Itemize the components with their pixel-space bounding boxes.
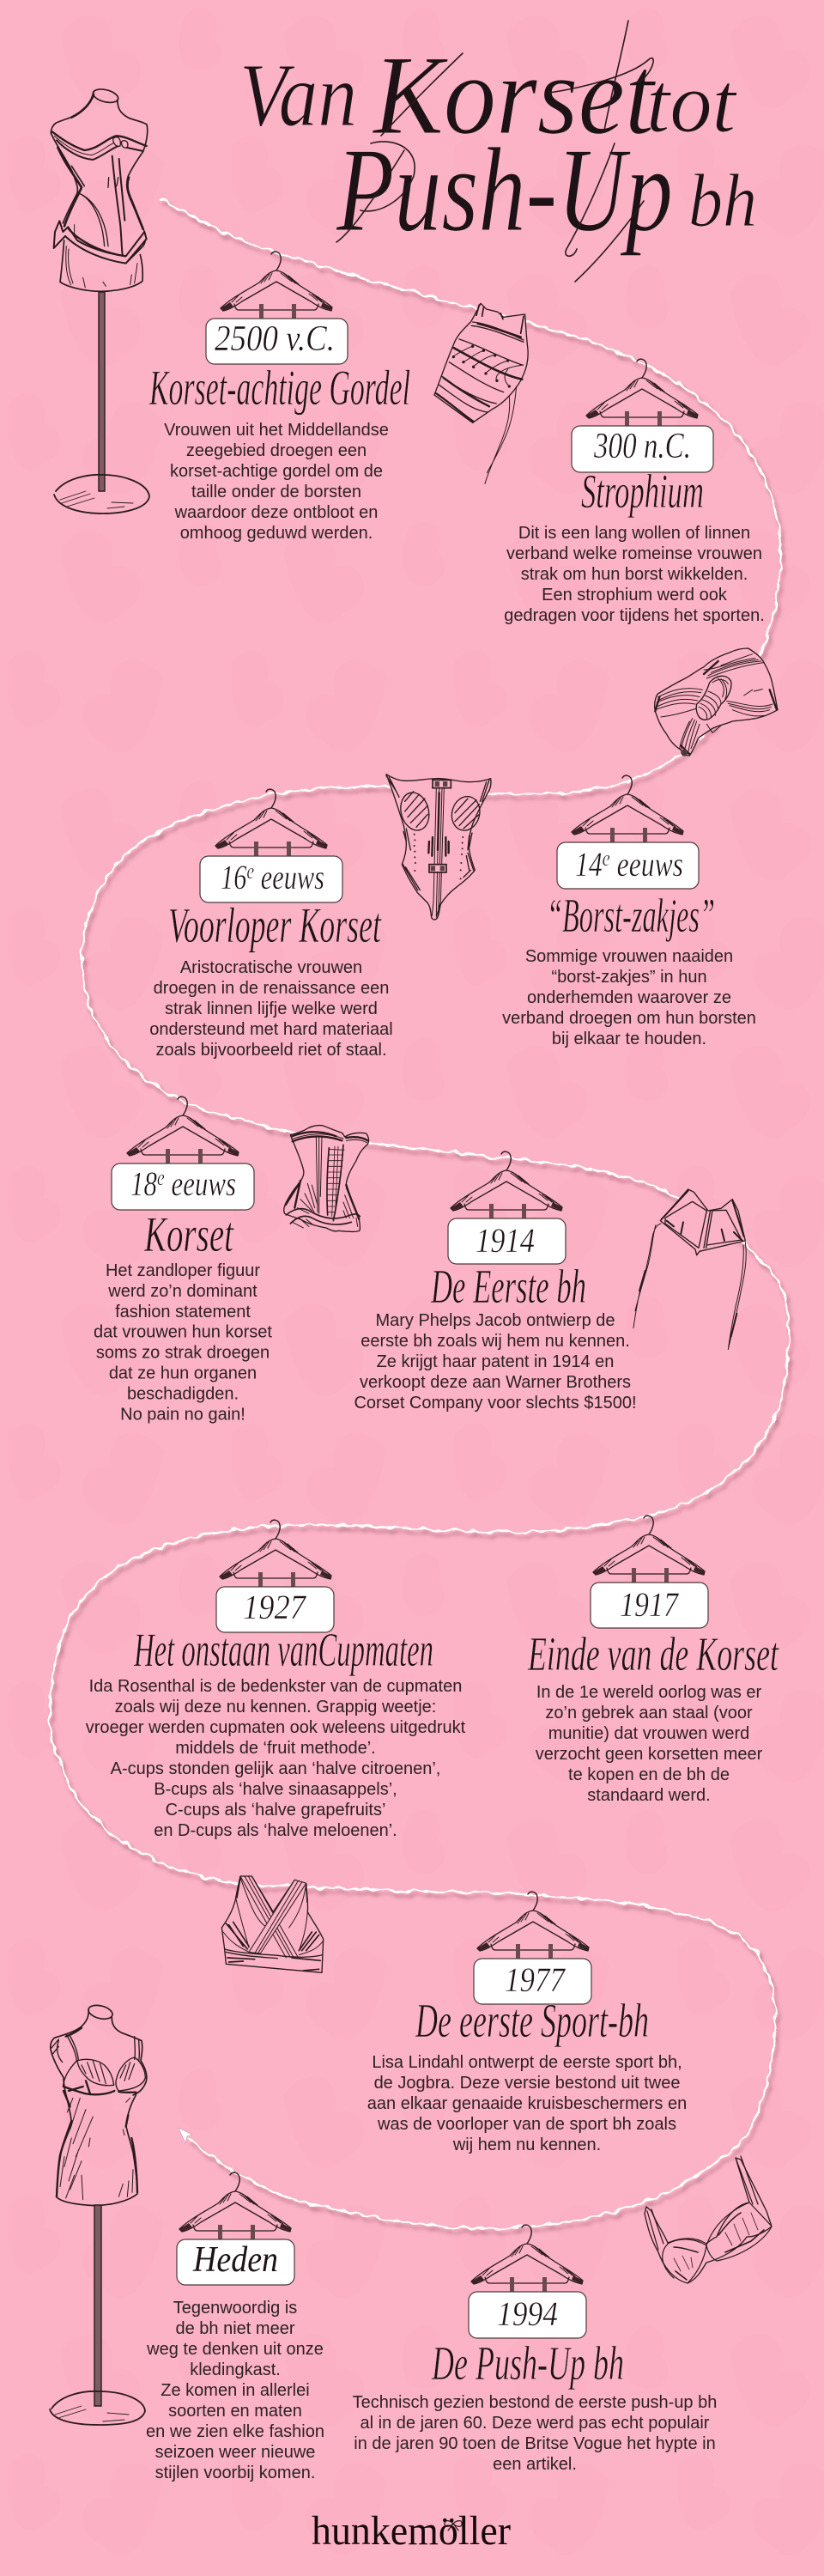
text block: waardoor deze ontbloot en: [174, 503, 378, 522]
text block: korset-achtige gordel om de: [170, 462, 383, 481]
date tag: eeuws: [610, 845, 683, 884]
date tag: eeuws: [165, 1164, 236, 1203]
icon: hanger: [593, 1516, 705, 1583]
text block: seizoen weer nieuwe: [155, 2443, 315, 2462]
text block: Technisch gezien bestond de eerste push-up bh: [353, 2393, 717, 2412]
panel: 1977: [367, 1892, 687, 2154]
heading: De eerste Sport-bh: [415, 1995, 649, 2048]
date tag: 1927: [243, 1588, 307, 1626]
panel: 14e eeuws: [502, 775, 756, 1048]
text block: eerste bh zoals wij hem nu kennen.: [360, 1332, 630, 1351]
icon: hanger: [477, 1892, 589, 1959]
date tag: Heden: [192, 2240, 278, 2280]
panel: 1927: [86, 1520, 466, 1840]
text block: een artikel.: [493, 2455, 577, 2474]
text block: Sommige vrouwen naaiden: [525, 947, 733, 966]
panel: 1914: [354, 1151, 637, 1413]
icon: eerste bh: [633, 1189, 746, 1350]
text block: strak om hun borst wikkelden.: [521, 565, 748, 584]
text block: stijlen voorbij komen.: [155, 2464, 315, 2482]
icon: hanger: [221, 252, 332, 319]
date tag: e: [157, 1165, 165, 1190]
logo: hunkemöller: [312, 2508, 511, 2554]
date tag: 14: [575, 845, 609, 884]
text block: in de jaren 90 toen de Britse Vogue het hypte in: [354, 2434, 716, 2453]
text block: kledingkast.: [190, 2360, 281, 2379]
text block: de Jogbra. Deze versie bestond uit twee: [374, 2074, 680, 2093]
heading: De Push-Up bh: [431, 2337, 624, 2391]
text block: zoals wij deze nu kennen. Grappig weetje:: [115, 1698, 436, 1716]
date tag: e: [603, 846, 610, 871]
text block: B-cups als ‘halve sinaasappels’,: [154, 1780, 397, 1799]
date tag: eeuws: [254, 858, 324, 896]
panel: Heden: [146, 2172, 324, 2482]
text block: Ze komen in allerlei: [161, 2381, 310, 2400]
date tag: 16: [221, 858, 255, 896]
text block: soms zo strak droegen: [96, 1344, 270, 1363]
icon: push-up bh: [645, 2156, 772, 2283]
date tag: 300 n.C.: [593, 427, 691, 466]
text block: fashion statement: [115, 1303, 251, 1321]
icon: hanger: [586, 359, 698, 426]
text block: verzocht geen korsetten meer: [536, 1745, 763, 1764]
heading: Korset: [143, 1206, 234, 1262]
panel: 1917: [527, 1516, 779, 1805]
text block: Corset Company voor slechts $1500!: [354, 1394, 637, 1413]
text block: Aristocratische vrouwen: [180, 958, 362, 977]
date tag: e: [246, 859, 254, 884]
text block: Ida Rosenthal is de bedenkster van de cupmaten: [89, 1677, 462, 1696]
icon: voorloper korset: [386, 775, 491, 920]
text block: munitie) dat vrouwen werd: [548, 1724, 749, 1743]
icon: mannequin with corset: [51, 87, 149, 513]
date tag: 1994: [497, 2294, 558, 2333]
text block: A-cups stonden gelijk aan ‘halve citroenen’,: [111, 1759, 440, 1778]
date tag: [112, 1163, 254, 1210]
text block: Ze krijgt haar patent in 1914 en: [377, 1352, 614, 1371]
icon: hanger: [220, 1520, 331, 1587]
panel: 2500 v.C.: [148, 252, 410, 543]
text block: Dit is een lang wollen of linnen: [518, 524, 750, 543]
date tag: 1917: [620, 1585, 680, 1624]
text block: zo’n gebrek aan staal (voor: [545, 1704, 753, 1722]
text block: C-cups als ‘halve grapefruits’: [166, 1801, 385, 1820]
text block: middels de ‘fruit methode’.: [175, 1739, 376, 1758]
text block: de bh niet meer: [176, 2319, 295, 2338]
text block: No pain no gain!: [120, 1405, 245, 1424]
text block: strak linnen lijfje welke werd: [165, 999, 378, 1018]
panel: 18e eeuws: [94, 1097, 272, 1424]
text block: te kopen en de bh de: [568, 1765, 730, 1784]
date tag: [216, 1587, 334, 1632]
title: bh: [688, 160, 757, 243]
heading: De Eerste bh: [430, 1261, 586, 1314]
date tag: 18: [130, 1164, 165, 1203]
heading: Strophium: [581, 465, 704, 519]
text block: Lisa Lindahl ontwerpt de eerste sport bh,: [372, 2053, 682, 2072]
text block: omhoog geduwd werden.: [180, 524, 373, 543]
text block: onderhemden waarover ze: [527, 988, 731, 1007]
text block: taille onder de borsten: [191, 483, 361, 501]
text block: Vrouwen uit het Middellandse: [164, 421, 389, 440]
text block: Tegenwoordig is: [173, 2299, 297, 2318]
heading: Korset-achtige Gordel: [148, 360, 410, 416]
text block: beschadigden.: [127, 1384, 239, 1403]
text block: zeegebied droegen een: [186, 441, 367, 460]
icon: strophium: [655, 648, 778, 756]
date tag: [469, 2292, 586, 2338]
text block: was de voorloper van de sport bh zoals: [377, 2115, 676, 2134]
text block: “borst-zakjes” in hun: [551, 968, 707, 987]
icon: mannequin with bra: [50, 2003, 147, 2425]
icon: korset-achtige gordel: [434, 303, 528, 483]
icon: hanger: [572, 775, 683, 842]
icon: logo bow: [445, 2521, 462, 2530]
icon: 18e eeuws korset: [284, 1126, 369, 1231]
date tag: [474, 1959, 591, 2004]
text block: verband droegen om hun borsten: [502, 1009, 756, 1028]
text block: gedragen voor tijdens het sporten.: [504, 606, 765, 625]
text block: bij elkaar te houden.: [552, 1030, 706, 1048]
text block: soorten en maten: [168, 2402, 302, 2421]
text block: aan elkaar genaaide kruisbeschermers en: [367, 2094, 687, 2113]
text block: weg te denken uit onze: [146, 2340, 324, 2359]
text block: In de 1e wereld oorlog was er: [536, 1683, 762, 1702]
text block: dat ze hun organen: [109, 1364, 257, 1382]
text block: droegen in de renaissance een: [154, 979, 389, 998]
date tag: [177, 2239, 294, 2285]
text block: al in de jaren 60. Deze werd pas echt populair: [360, 2414, 710, 2433]
heading: Het onstaan vanCupmaten: [133, 1624, 433, 1677]
arrow head: [179, 2128, 192, 2143]
text block: dat vrouwen hun korset: [94, 1323, 272, 1342]
title: tot: [646, 55, 737, 150]
text block: werd zo’n dominant: [107, 1282, 258, 1301]
icon: hanger: [215, 789, 327, 856]
date tag: [557, 842, 699, 889]
text block: Het zandloper figuur: [106, 1261, 260, 1280]
title: Korset: [372, 32, 657, 158]
text block: Een strophium werd ook: [542, 586, 728, 605]
panel: 300 n.C.: [504, 359, 765, 625]
title: Van: [239, 45, 357, 145]
icon: hanger: [451, 1151, 562, 1218]
panel: 1994: [353, 2225, 717, 2474]
date tag: [448, 1218, 566, 1264]
text block: en D-cups als ‘halve meloenen’.: [154, 1821, 397, 1840]
date tag: [591, 1583, 708, 1628]
text block: verband welke romeinse vrouwen: [506, 544, 762, 563]
icon: hanger: [127, 1097, 239, 1163]
text block: ondersteund met hard materiaal: [149, 1020, 393, 1039]
text block: vroeger werden cupmaten ook weleens uitgedrukt: [86, 1718, 466, 1737]
text block: en we zien elke fashion: [146, 2422, 324, 2441]
title: [239, 21, 757, 282]
date tag: 1977: [505, 1960, 566, 1999]
date tag: [200, 856, 342, 902]
text block: wij hem nu kennen.: [452, 2136, 601, 2154]
icon: hanger: [179, 2172, 291, 2239]
text block: standaard werd.: [587, 1786, 711, 1805]
title: Push-Up: [336, 124, 673, 257]
icon: hanger: [471, 2225, 583, 2292]
text block: zoals bijvoorbeeld riet of staal.: [155, 1041, 387, 1060]
heading: Voorloper Korset: [168, 897, 382, 953]
date tag: 1914: [476, 1221, 535, 1260]
panel: 16e eeuws: [149, 789, 393, 1060]
text block: Mary Phelps Jacob ontwierp de: [375, 1311, 615, 1330]
text block: verkoopt deze aan Warner Brothers: [360, 1373, 631, 1392]
date tag: 2500 v.C.: [215, 319, 335, 359]
timeline rope: [50, 199, 789, 2228]
icon: sport-bh: [221, 1876, 324, 1972]
